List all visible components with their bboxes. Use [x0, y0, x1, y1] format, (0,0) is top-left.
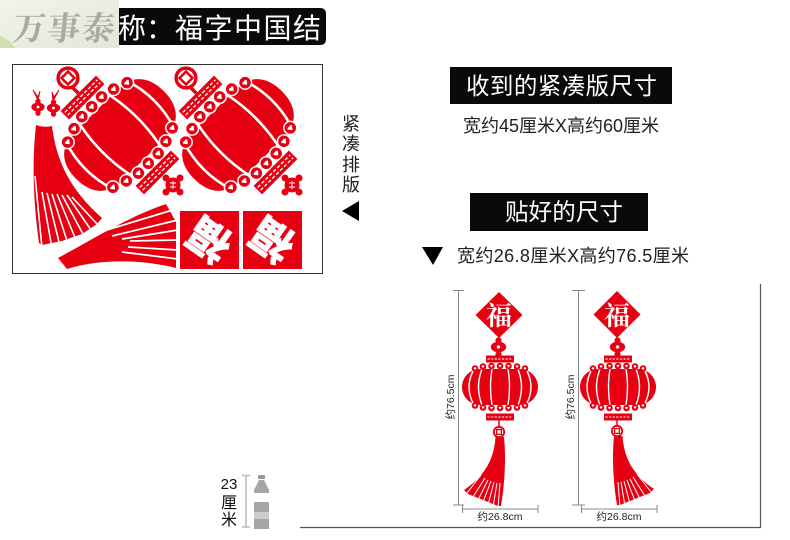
vertical label: compact layout: 凑: [342, 134, 360, 154]
arrow: left triangle: [342, 201, 359, 221]
frame axes: [300, 284, 760, 528]
arrow: down triangle: [422, 247, 443, 265]
vertical label: compact layout: 紧: [342, 114, 360, 134]
heading: applied size: 贴好的尺寸: [505, 199, 623, 225]
vertical label: compact layout: 排: [342, 155, 360, 175]
tassel decal upright: [34, 125, 102, 248]
title bar: [118, 8, 326, 45]
dimension: right height: 约76.5cm: [564, 374, 577, 419]
dimension: left width: [462, 505, 538, 523]
diamond fu: [594, 291, 640, 338]
fu square right: 福: [236, 205, 306, 279]
logo watermark: 万事泰: [11, 3, 118, 50]
title bar: 称: [118, 13, 146, 44]
text: compact dimensions: 宽约45厘米X高约60厘米: [463, 116, 659, 136]
dimension: left height: [444, 290, 464, 505]
panel: compact layout sheet: [12, 43, 324, 279]
lantern decal right: [146, 43, 324, 221]
diamond fu: [476, 292, 522, 338]
scale reference: 23 cm bottle: [221, 475, 269, 529]
applied lantern right: [580, 291, 656, 507]
dimension: right width: 约26.8cm: [597, 510, 642, 523]
scale label: [221, 476, 237, 529]
icon: bottle: [254, 475, 269, 529]
lantern decal left: [28, 43, 206, 221]
vertical label: compact layout: 版: [342, 175, 360, 195]
small knots: [31, 90, 60, 117]
scale label: 米: [221, 511, 237, 529]
dimension: right width: [582, 505, 657, 523]
title bar: 福字中国结: [175, 13, 321, 44]
heading: received compact size: [450, 67, 672, 104]
dimension: left height: 约76.5cm: [444, 374, 457, 419]
tassel decal diagonal: [58, 204, 178, 269]
scale label: 厘: [221, 495, 237, 512]
vertical label: compact layout: [342, 114, 360, 195]
title bar: ：: [146, 13, 174, 44]
fu square left: 福: [173, 205, 243, 279]
scale label: 23: [221, 476, 237, 493]
heading: received compact size: 收到的紧凑版尺寸: [466, 73, 657, 99]
applied lantern left: [462, 292, 538, 508]
diamond fu: 福: [486, 296, 512, 333]
dimension: right height: [564, 290, 585, 505]
heading: applied size: [470, 193, 648, 231]
diamond fu: 福: [604, 296, 630, 333]
text: applied dimensions: 宽约26.8厘米X高约76.5厘米: [457, 246, 689, 266]
dimension: left width: 约26.8cm: [478, 510, 523, 523]
